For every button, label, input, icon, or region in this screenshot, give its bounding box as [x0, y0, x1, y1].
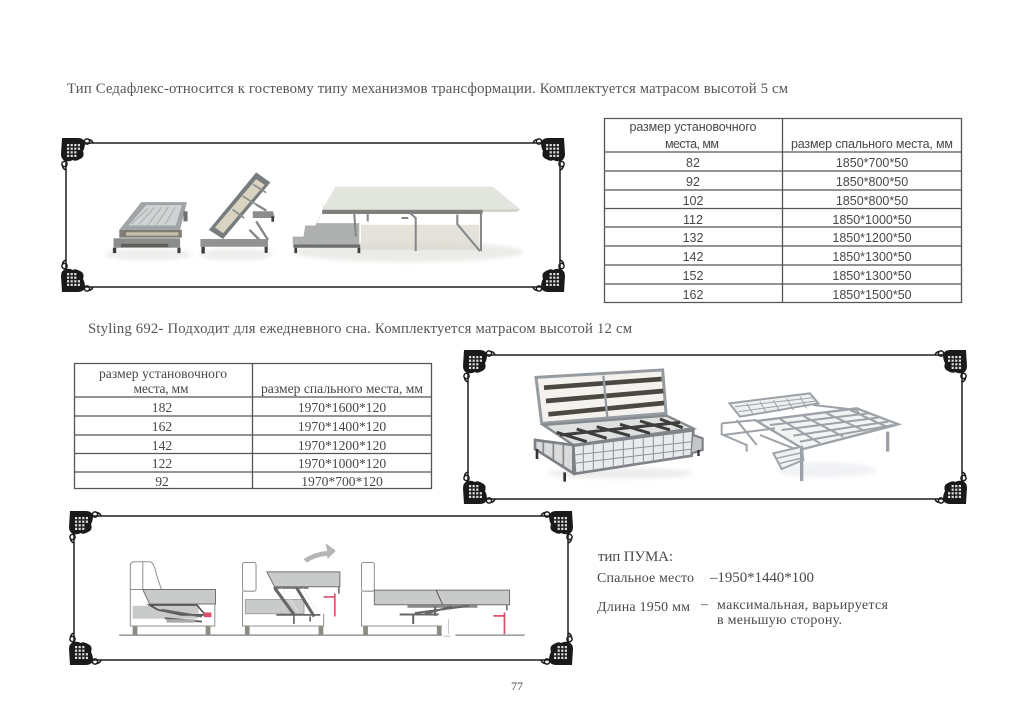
table: Styling 692 sizes: размер установочного [99, 366, 227, 381]
table: Sedaflex sizes: размер установочного [630, 120, 757, 134]
table: Styling 692 sizes: размер спального места, мм [261, 381, 423, 396]
table: Sedaflex sizes: 82 [686, 156, 700, 170]
table: Styling 692 sizes [74, 364, 432, 489]
unfolded wire frame [722, 393, 898, 481]
text block: Puma specification [597, 549, 889, 628]
image: Sedaflex mechanism in three positions [104, 172, 523, 262]
text block: Puma specification: в меньшую сторону. [717, 613, 842, 628]
heading: Styling 692 description: Styling 692- Подходит для ежедневного сна. Комплектуется матрасом высотой 12 см [88, 321, 632, 337]
heading: Sedaflex description: Тип Седафлекс-относится к гостевому типу механизмов трансформации. Комплектуется матрасом высотой 5 см [67, 81, 788, 97]
corner ornaments [69, 511, 573, 665]
text block: Puma specification: Длина 1950 мм [597, 600, 690, 615]
corner ornaments [61, 138, 565, 292]
panel: Sedaflex photo frame [61, 138, 565, 292]
open bed with mattress [293, 187, 520, 253]
sofa: open position [361, 562, 510, 636]
table: Sedaflex sizes: 162 [683, 288, 703, 302]
panel: Puma diagram frame [69, 511, 573, 665]
page number: 77 [511, 679, 523, 693]
table: Styling 692 sizes: 1970*1600*120 [298, 400, 386, 415]
table: Sedaflex sizes: 1850*1300*50 [832, 250, 912, 264]
table: Sedaflex sizes: 1850*800*50 [836, 194, 908, 208]
table: Sedaflex sizes: 132 [683, 231, 703, 245]
sofa: closed position [130, 562, 215, 635]
table: Styling 692 sizes: 162 [152, 419, 172, 434]
table: Styling 692 sizes: 142 [152, 438, 172, 453]
table: Sedaflex sizes: 152 [683, 269, 703, 283]
table: Sedaflex sizes: 1850*700*50 [836, 156, 908, 170]
arrow [303, 543, 336, 562]
floor [119, 633, 525, 637]
table: Sedaflex sizes: 1850*800*50 [836, 175, 908, 189]
table: Styling 692 sizes: 122 [152, 456, 172, 471]
text block: Puma specification: Спальное место [597, 571, 694, 586]
table: Sedaflex sizes: 1850*1500*50 [832, 288, 912, 302]
table: Sedaflex sizes: 1850*1000*50 [832, 213, 912, 227]
table: Sedaflex sizes: 112 [683, 213, 703, 227]
half-open mechanism [200, 172, 275, 254]
panel: Styling 692 photo frame [463, 350, 967, 504]
text block: Puma specification: –1950*1440*100 [709, 570, 814, 586]
folded mechanism [113, 202, 188, 253]
table: Styling 692 sizes: 182 [152, 400, 172, 415]
sofa: seat lifted, with arrow [243, 543, 340, 635]
table: Styling 692 sizes: 1970*1000*120 [298, 456, 386, 471]
table: Sedaflex sizes: 1850*1300*50 [832, 269, 912, 283]
text block: Puma specification: максимальная, варьируется [717, 598, 889, 613]
table: Sedaflex sizes: 102 [683, 194, 703, 208]
table: Styling 692 sizes: места, мм [134, 381, 189, 396]
table: Sedaflex sizes [604, 118, 962, 302]
text block: Puma specification: – [700, 597, 709, 612]
text block: Puma specification: тип ПУМА: [598, 549, 673, 565]
corner ornaments [463, 350, 967, 504]
table: Styling 692 sizes: 1970*1200*120 [298, 438, 386, 453]
table: Sedaflex sizes: 1850*1200*50 [832, 231, 912, 245]
image: sofa frames, folded and unfolded [535, 370, 898, 482]
diagram: Puma sofa side views [119, 543, 525, 636]
table: Sedaflex sizes: размер спального места, мм [791, 137, 953, 151]
table: Styling 692 sizes: 92 [155, 474, 169, 489]
table: Styling 692 sizes: 1970*700*120 [301, 474, 383, 489]
table: Sedaflex sizes: 142 [683, 250, 703, 264]
folded frame with raised back [535, 370, 703, 482]
table: Sedaflex sizes: 92 [686, 175, 700, 189]
table: Styling 692 sizes: 1970*1400*120 [298, 419, 386, 434]
table: Sedaflex sizes: места, мм [665, 137, 719, 151]
